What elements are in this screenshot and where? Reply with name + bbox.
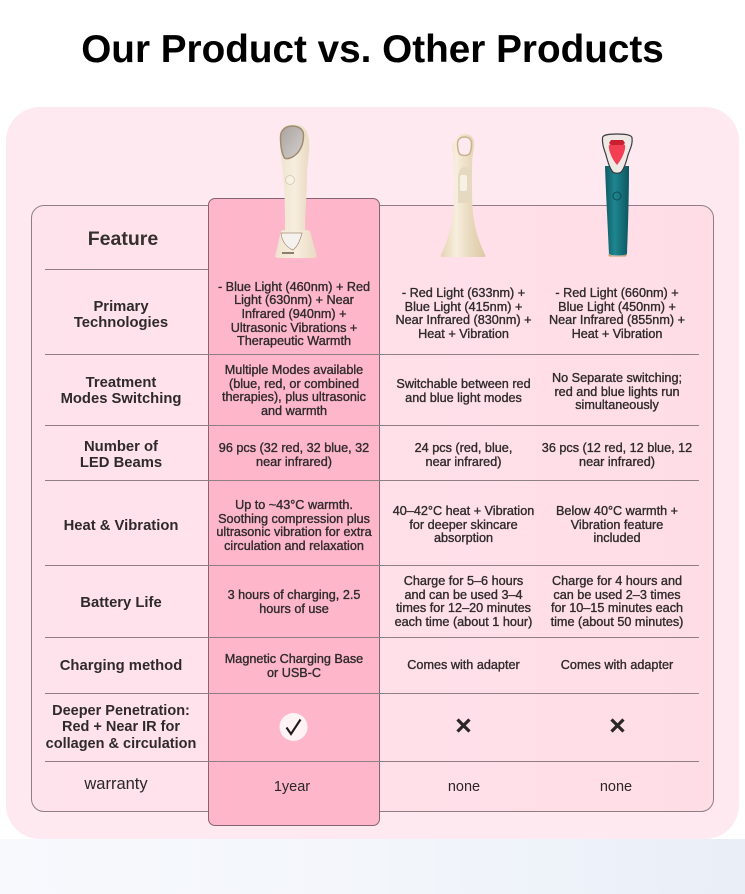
cell: product three modes: simultaneously <box>575 398 659 412</box>
cell: product three battery <box>550 574 683 629</box>
cell: product three technologies: Blue Light (450nm) + <box>558 300 676 314</box>
row label: deeper penetration: Deeper Penetration: <box>52 703 190 719</box>
row label: number of led beams <box>80 439 162 471</box>
cell: our product modes: Multiple Modes available <box>225 363 363 377</box>
cell: product three battery: time (about 50 minutes) <box>551 615 683 629</box>
row label: deeper penetration <box>46 703 196 752</box>
cell: product two battery <box>395 574 532 629</box>
cell: product two heat <box>392 504 534 545</box>
icon: check mark in white circle <box>280 713 308 741</box>
cell: our product charging: or USB-C <box>267 666 321 680</box>
cell: product two battery: each time (about 1 hour) <box>395 615 532 629</box>
cell: product three heat <box>556 504 678 545</box>
cell: product two battery: times for 12–20 minutes <box>396 601 531 615</box>
highlighted product column <box>208 198 380 826</box>
icon: cross product two <box>456 718 471 733</box>
cell: product three technologies <box>549 286 685 341</box>
row label: primary technologies: Primary <box>93 299 149 315</box>
row label: number of led beams: LED Beams <box>80 455 162 471</box>
cell: our product modes: and warmth <box>261 404 327 418</box>
cell: our product battery: 3 hours of charging, 2.5 <box>228 588 360 602</box>
cell: our product heat <box>216 498 372 553</box>
cell: our product heat: Soothing compression plus <box>218 512 370 526</box>
cell: product two battery: and can be used 3–4 <box>404 588 523 602</box>
cell: our product heat: Up to ~43°C warmth. <box>235 498 353 512</box>
row label: treatment modes switching <box>61 375 181 407</box>
row label: warranty: warranty <box>84 775 148 793</box>
cell: product three technologies: Near Infrared (855nm) + <box>549 313 685 327</box>
cell: our product warranty: 1year <box>274 779 310 795</box>
cell: product two heat: for deeper skincare <box>409 518 518 532</box>
row label: deeper penetration: collagen & circulation <box>46 736 196 752</box>
cell: product three modes <box>552 371 682 412</box>
table frame <box>31 205 714 812</box>
cell: product two beams <box>415 441 512 469</box>
cell: product two modes: and blue light modes <box>405 391 522 405</box>
row label: number of led beams: Number of <box>84 439 158 455</box>
cell: product two beams: near infrared) <box>426 455 501 469</box>
cell: product two technologies <box>396 286 532 341</box>
cell: product two heat: 40–42°C heat + Vibration <box>393 504 534 518</box>
cell: product three battery: Charge for 4 hours and <box>552 574 682 588</box>
cell: product two battery: Charge for 5–6 hours <box>404 574 523 588</box>
row label: deeper penetration: Red + Near IR for <box>62 719 180 735</box>
cell: our product technologies: Light (630nm) + Near <box>234 293 354 307</box>
cell: product two technologies: Blue Light (415nm) + <box>405 300 522 314</box>
cell: our product beams: 96 pcs (32 red, 32 blue, 32 <box>219 441 369 455</box>
icon: cross product three <box>610 718 625 733</box>
title: Our Product vs. Other Products <box>81 28 664 71</box>
cell: product three heat: Vibration feature <box>571 518 663 532</box>
row label: primary technologies <box>74 299 168 331</box>
cell: product three beams: near infrared) <box>579 455 655 469</box>
cell: product three beams <box>542 441 692 469</box>
row label: battery life: Battery Life <box>80 595 162 611</box>
cell: product three warranty: none <box>600 779 632 795</box>
cell: product two technologies: Near Infrared (830nm) + <box>396 313 531 327</box>
cell: our product modes: (blue, red, or combined <box>229 377 359 391</box>
cell: product two modes <box>396 377 531 405</box>
cell: product two technologies: Heat + Vibration <box>418 327 509 341</box>
cell: our product battery <box>228 588 360 616</box>
cell: our product beams: near infrared) <box>256 455 332 469</box>
cell: our product modes: therapies), plus ultrasonic <box>222 390 366 404</box>
cell: our product technologies <box>218 280 370 348</box>
cell: product three modes: red and blue lights run <box>554 385 680 399</box>
cell: product three beams: 36 pcs (12 red, 12 blue, 12 <box>542 441 692 455</box>
cell: product three modes: No Separate switching; <box>552 371 682 385</box>
cell: product three heat: included <box>593 531 641 545</box>
cell: our product battery: hours of use <box>259 602 329 616</box>
row label: treatment modes switching: Modes Switching <box>61 391 181 407</box>
cell: our product technologies: Infrared (940nm) + <box>241 307 347 321</box>
bottom background band <box>0 839 745 894</box>
cell: our product heat: circulation and relaxation <box>224 539 364 553</box>
heading: feature: Feature <box>88 228 158 250</box>
cell: our product charging <box>225 652 363 680</box>
cell: product two charging: Comes with adapter <box>407 658 520 672</box>
row label: heat and vibration: Heat & Vibration <box>64 518 178 534</box>
cell: product three technologies: - Red Light (660nm) + <box>555 286 679 300</box>
cell: product three battery: can be used 2–3 times <box>553 588 681 602</box>
cell: product three heat: Below 40°C warmth + <box>556 504 678 518</box>
cell: product two modes: Switchable between red <box>396 377 531 391</box>
cell: our product technologies: - Blue Light (460nm) + Red <box>218 280 370 294</box>
cell: our product heat: ultrasonic vibration for extra <box>216 525 372 539</box>
row label: treatment modes switching: Treatment <box>86 375 156 391</box>
cell: our product technologies: Therapeutic Warmth <box>237 334 351 348</box>
cell: product three battery: for 10–15 minutes each <box>551 601 683 615</box>
cell: product two warranty: none <box>448 779 480 795</box>
cell: product three technologies: Heat + Vibration <box>572 327 662 341</box>
row label: primary technologies: Technologies <box>74 315 168 331</box>
cell: product two technologies: - Red Light (633nm) + <box>402 286 525 300</box>
cell: product three charging: Comes with adapter <box>561 658 673 672</box>
cell: our product modes <box>222 363 366 418</box>
cell: product two beams: 24 pcs (red, blue, <box>415 441 512 455</box>
cell: our product charging: Magnetic Charging Base <box>225 652 363 666</box>
cell: product two heat: absorption <box>434 531 493 545</box>
cell: our product beams <box>219 441 369 469</box>
row label: charging method: Charging method <box>60 658 182 674</box>
cell: our product technologies: Ultrasonic Vibrations + <box>231 321 357 335</box>
